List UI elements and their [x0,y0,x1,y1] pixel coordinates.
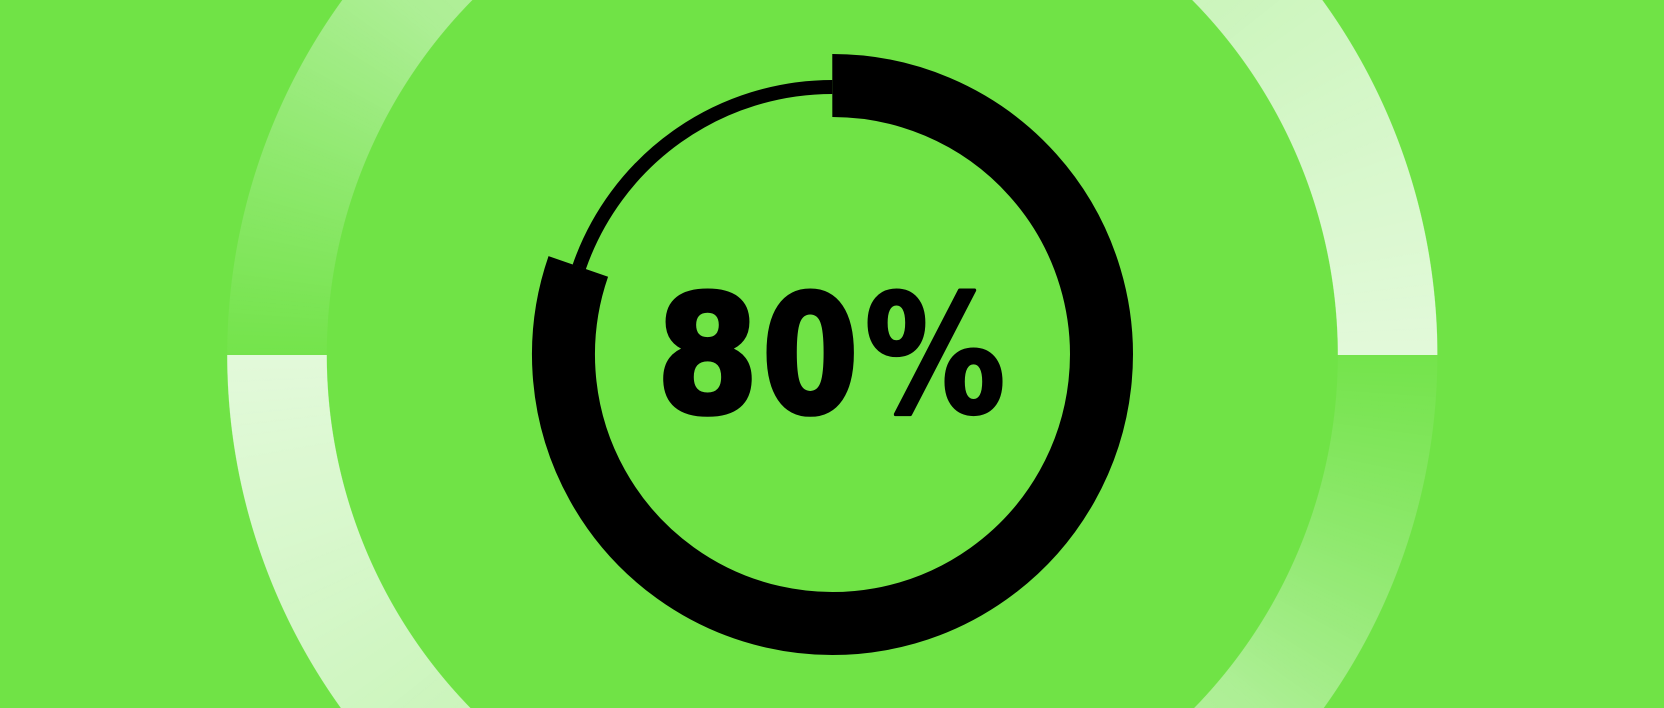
value label: 80% [656,261,1005,452]
value label: 80%: % [864,261,1005,452]
value label: 80%: 8 [656,261,759,451]
value label: 80%: 0 [762,261,858,451]
donut: thin remaining track arc [579,87,832,267]
decorative outer gradient ring [227,0,1438,708]
donut: thick 80% progress arc [563,85,1101,623]
